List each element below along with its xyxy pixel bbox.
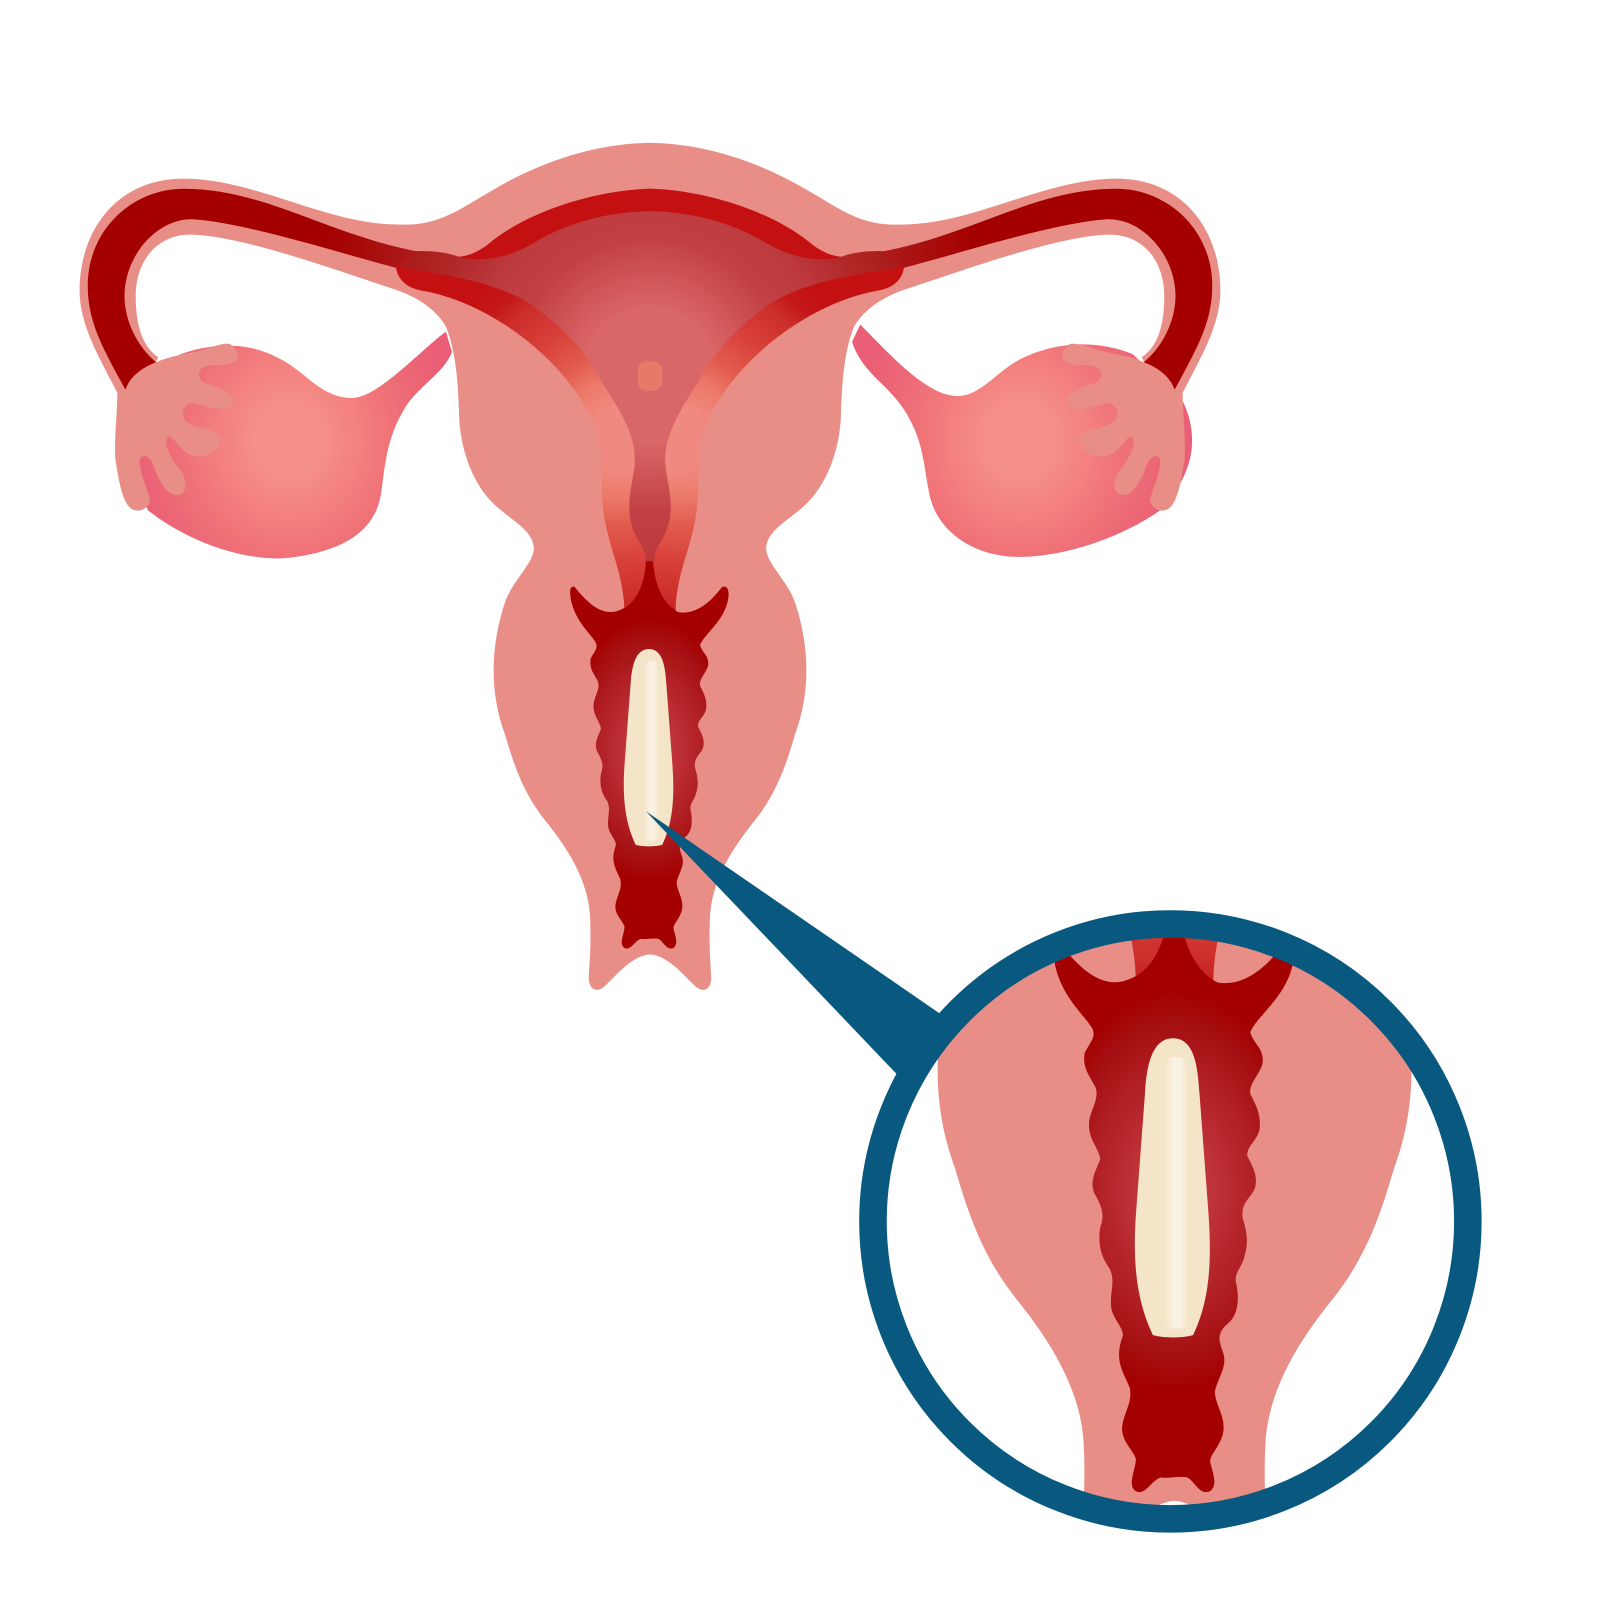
right fimbriae [1062, 344, 1185, 511]
magnified inset [859, 910, 1482, 1533]
vaginal canal [570, 561, 729, 949]
inset ring [873, 924, 1468, 1519]
uterine cavity left [398, 211, 653, 561]
uterine cavity right [647, 211, 902, 561]
left ovary and ligament [122, 332, 452, 558]
uterus body right half [647, 143, 1220, 990]
uterine wall right [647, 189, 904, 614]
uterus body left half [80, 143, 653, 990]
callout pointer [646, 811, 944, 1078]
cavity centre highlight [638, 361, 662, 391]
inset enlarged view [938, 938, 1412, 1505]
left fimbriae [115, 344, 238, 511]
right fallopian tube [880, 189, 1212, 390]
right ovary and ligament [852, 324, 1192, 557]
tampon [624, 649, 673, 846]
inset background [886, 937, 1455, 1506]
left fallopian tube [88, 189, 420, 390]
anatomy diagram: uterus, tubes and ovaries [80, 143, 1220, 990]
uterine wall left [396, 189, 653, 614]
